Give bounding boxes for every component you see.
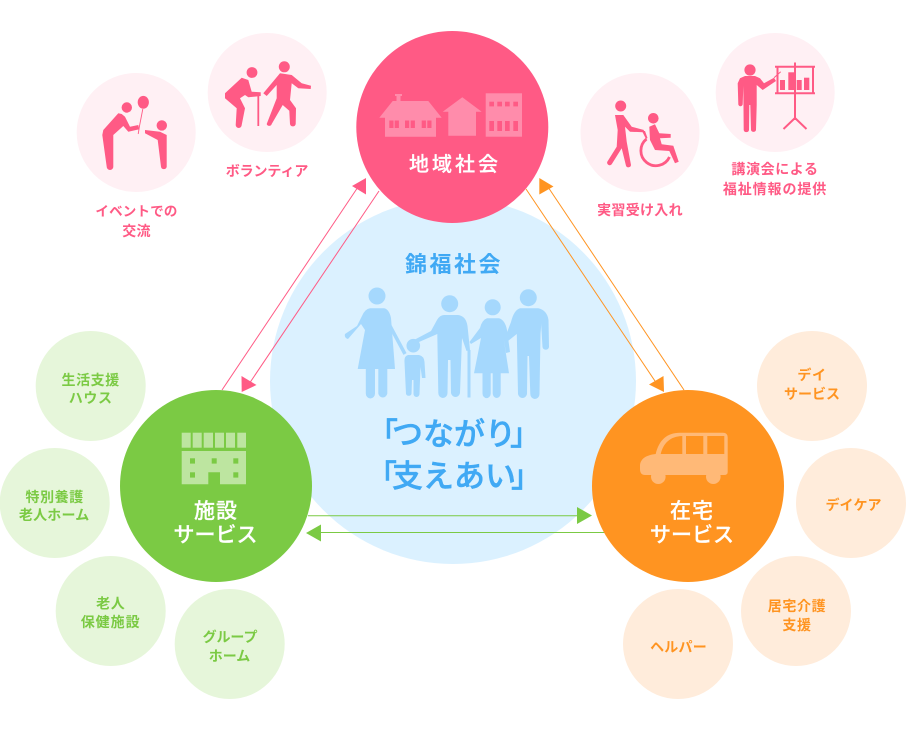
icon: volunteers walking <box>225 61 311 128</box>
item: group home: グループ <box>203 629 257 645</box>
circle: lectures: 福祉情報の提供 <box>723 181 827 197</box>
item: helper <box>623 589 733 699</box>
circle: volunteer <box>208 33 327 179</box>
main circle: community <box>356 31 548 223</box>
circle: lectures <box>716 33 835 197</box>
facility item circles <box>0 331 285 699</box>
label: ボランティア <box>226 163 308 179</box>
item: supported living house: ハウス <box>69 390 113 406</box>
arrows: facility and home services <box>306 507 606 542</box>
item: group home: ホーム <box>209 648 250 664</box>
icon: houses and building <box>379 93 522 137</box>
center title: 錦福社会 <box>405 252 503 277</box>
main circle: facility services <box>120 390 312 582</box>
item: day care <box>796 448 906 558</box>
label: イベントでの <box>95 204 178 219</box>
label: 実習受け入れ <box>597 202 683 218</box>
slogan: 「支えあい」 <box>366 459 542 494</box>
item: day service: デイ <box>797 367 827 383</box>
icon: lecturer with chart <box>738 62 815 132</box>
icon: balloon exchange <box>102 96 167 170</box>
arrows: community to home services <box>526 178 684 392</box>
item: elderly health facility: 老人 <box>96 596 125 612</box>
item: special nursing home: 老人ホーム <box>19 507 89 523</box>
icon: wheelchair helper <box>607 100 679 167</box>
item: home care support: 支援 <box>782 617 812 633</box>
item: helper: ヘルパー <box>650 639 707 655</box>
label: 施設 <box>194 500 238 523</box>
icon: van <box>640 433 728 484</box>
label: 講演会による <box>731 161 819 177</box>
circle: trainees <box>580 73 700 218</box>
arrows: community to facility services <box>222 178 379 392</box>
main circle: home services <box>592 390 784 582</box>
central light blue circle <box>270 198 636 564</box>
home item circles <box>623 331 906 699</box>
slogan <box>366 417 542 494</box>
item: group home <box>175 589 285 699</box>
item: supported living house <box>36 331 146 441</box>
label: 在宅 <box>670 500 714 523</box>
item: day service: サービス <box>784 386 840 402</box>
item: special nursing home <box>0 448 110 558</box>
circle: event exchange: 交流 <box>122 223 151 239</box>
item: home care support: 居宅介護 <box>768 598 826 614</box>
item: day service <box>757 331 867 441</box>
circle: event exchange <box>77 73 196 239</box>
item: special nursing home: 特別養護 <box>25 489 84 505</box>
main circle: home services: サービス <box>650 524 734 547</box>
item: home care support <box>741 556 851 666</box>
label: 地域社会 <box>409 153 501 176</box>
item: elderly health facility <box>56 556 166 666</box>
item: day care: デイケア <box>826 497 882 513</box>
icon: family <box>345 288 549 399</box>
item: supported living house: 生活支援 <box>61 372 120 388</box>
slogan: 「つながり」 <box>367 417 541 452</box>
item: elderly health facility: 保健施設 <box>81 614 141 630</box>
main circle: facility services: サービス <box>174 524 258 547</box>
icon: facility building <box>182 433 246 484</box>
